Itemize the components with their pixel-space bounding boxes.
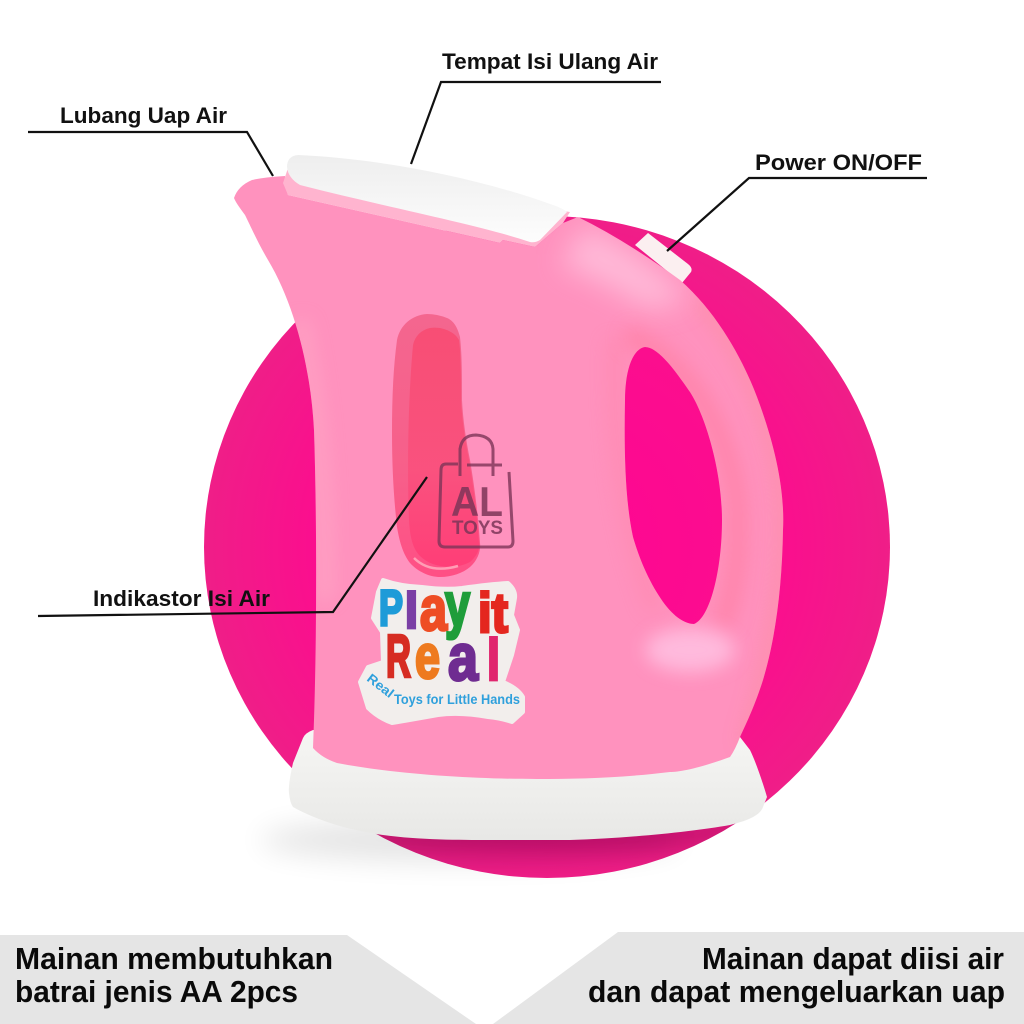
- logo letters AL: AL: [451, 478, 503, 525]
- bottom left banner: [0, 935, 476, 1024]
- sticker letter y: y: [445, 571, 470, 640]
- bag handle: [460, 435, 502, 476]
- callout: Indikastor Isi Air: [38, 477, 427, 616]
- highlight under hole: [645, 628, 735, 672]
- sticker letter l: l: [405, 583, 418, 639]
- power button: [635, 233, 692, 283]
- right edge shade: [700, 300, 783, 745]
- shade left of hole: [614, 340, 655, 610]
- sticker letter P: P: [379, 580, 403, 636]
- kettle body with handle hole: [234, 176, 783, 779]
- bottom right banner: [493, 932, 1024, 1024]
- callout: Tempat Isi Ulang Air: [411, 49, 661, 164]
- left side highlight: [300, 320, 325, 600]
- sticker letter l: l: [487, 628, 500, 693]
- sticker tagline: Real: Real: [364, 671, 397, 701]
- base shadow: [260, 818, 780, 862]
- water level window: [392, 314, 480, 577]
- callout: Lubang Uap Air: [28, 103, 273, 176]
- pink background circle: [204, 216, 890, 878]
- banner text left: Mainan membutuhkan: [15, 941, 333, 976]
- watermark logo: AL Toys: [439, 435, 513, 547]
- kettle toy: [234, 155, 783, 840]
- banner text right: Mainan dapat diisi air: [702, 941, 1004, 976]
- logo letters TOYS: TOYS: [452, 518, 503, 539]
- window inner liquid: [408, 328, 479, 567]
- sticker letter R: R: [386, 623, 411, 690]
- callout: Indikastor Isi Air: Indikastor Isi Air: [93, 586, 270, 611]
- kettle base: [289, 730, 767, 840]
- window glare: [414, 558, 458, 569]
- sticker word it: it: [478, 581, 508, 644]
- callout: Power ON/OFF: Power ON/OFF: [755, 150, 922, 175]
- sticker letter a: a: [448, 620, 479, 694]
- body shading: [300, 225, 783, 745]
- sticker letter e: e: [415, 623, 440, 692]
- white lid: [287, 155, 567, 242]
- top shoulder highlight: [560, 225, 690, 310]
- ring shadow around handle hole: [625, 335, 738, 625]
- callout: Tempat Isi Ulang Air: Tempat Isi Ulang Air: [442, 49, 658, 74]
- sticker backing: [360, 580, 523, 723]
- sticker tagline: Toys for Little Hands: Toys for Little Hands: [394, 691, 520, 707]
- bag outline: [439, 464, 513, 547]
- sticker: Play it Real: [360, 571, 523, 723]
- banner text right: dan dapat mengeluarkan uap: [588, 974, 1005, 1009]
- sticker letter a: a: [420, 575, 447, 644]
- callout: Power ON/OFF: [667, 150, 927, 251]
- callout: Lubang Uap Air: Lubang Uap Air: [60, 103, 227, 128]
- lid groove: [283, 168, 570, 247]
- banner text left: batrai jenis AA 2pcs: [15, 974, 298, 1009]
